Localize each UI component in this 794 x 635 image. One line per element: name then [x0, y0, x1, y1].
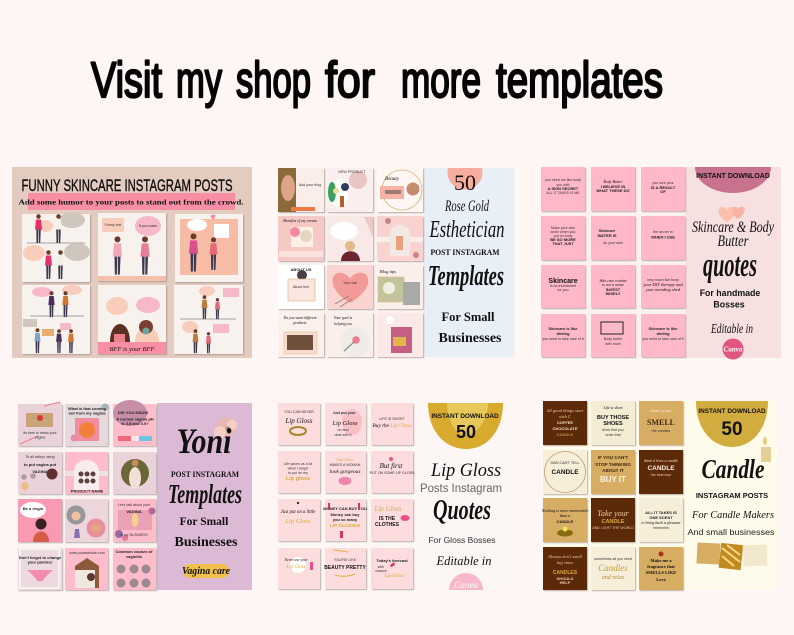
badge: gold instant download 50 — [428, 403, 503, 449]
right column background — [686, 167, 781, 358]
tile: beauty pretty: YOU'RE LIKE — [334, 558, 357, 562]
tile: candle bowl — [541, 498, 589, 542]
tile: quote 6: the secret to — [653, 230, 673, 234]
tile: quote 6 — [641, 216, 685, 260]
text: butter: Butter — [718, 233, 749, 250]
tile: candles and relax: sometimes all you need — [594, 557, 632, 561]
text: posts instagram: Posts Instagram — [420, 483, 502, 495]
tile: coffee chocolate — [543, 401, 587, 445]
badge: 50 — [448, 168, 482, 195]
tile: beauty pretty — [324, 548, 366, 589]
tile: forgot: to put on my — [288, 471, 308, 475]
text: rose gold: Rose Gold — [444, 198, 490, 215]
tile: gloss text — [325, 403, 366, 445]
tile: candles brown: big vines — [557, 560, 573, 565]
tile: quote 3: IS A RESULT — [651, 185, 676, 190]
tile: cream jar — [278, 216, 324, 261]
text: businesses: Businesses — [174, 535, 238, 550]
tile: panties: your panties! — [27, 560, 53, 564]
tile: did you know: A normal vagina pH — [116, 416, 154, 422]
tile: gold ring: Lip Gloss — [284, 417, 313, 425]
tile: quote 1: ALL IT TAKES IS ME — [546, 191, 580, 195]
tile: quote 12: you need to take care of it — [642, 337, 684, 341]
tile: quote 2 — [591, 167, 635, 211]
tile: buy it: IF YOU CAN'T — [598, 455, 628, 460]
tile: herbs: PRODUCT NAME — [71, 488, 104, 494]
text: vagina care: Vagina care — [182, 565, 230, 577]
text: bosses: Bosses — [713, 300, 745, 310]
tile: forecast: Lip Gloss — [383, 574, 404, 579]
text: esthetician: Esthetician — [429, 217, 504, 243]
tile: quote 3: you love your — [652, 181, 674, 185]
panel heading: FUNNY SKINCARE INSTAGRAM POSTS — [22, 176, 232, 195]
tile: look candle: CANDLE — [647, 465, 675, 472]
tile: quote 2: WHAT THESE DO — [596, 188, 630, 193]
title: shop — [236, 52, 311, 108]
text: businesses: Businesses — [438, 331, 502, 346]
tile: buy those shoes: order that — [605, 433, 621, 437]
tile: round candle: CANDLE — [551, 469, 579, 476]
tile: bottle: Lip Gloss — [286, 565, 305, 570]
panel: candle instagram posts — [541, 401, 778, 590]
tile: one scent: to bring back a pleasant — [642, 520, 681, 525]
text: for gloss bosses: For Gloss Bosses — [428, 535, 496, 545]
tile: quote 3: OF — [660, 189, 666, 194]
tile: friends comic — [22, 285, 90, 354]
badge: gold foil instant download 50: INSTANT DOWNLOAD — [698, 408, 766, 415]
tile: quote 7: Skincare — [548, 278, 578, 285]
tile: buy it — [591, 450, 635, 494]
tile: quote 8: INVEST — [606, 287, 621, 292]
tile: quote 4: smile when you — [551, 230, 575, 234]
tile: office talk: Funny text — [105, 223, 121, 227]
tile: candle bowl: than a — [560, 513, 570, 518]
tile: quote 5: do your skin — [603, 241, 623, 245]
icon: hearts — [719, 207, 745, 222]
tile: smell candles — [639, 401, 683, 445]
tile: flowers photo — [377, 265, 423, 309]
tile: is the clothes: CLOTHES — [375, 522, 400, 528]
tile: gold ring: YOU CAN NEVER — [284, 410, 314, 414]
tile: coffee chocolate: All good things start — [546, 408, 584, 413]
tile: smell candles: the candles — [652, 429, 670, 433]
tile: little lip gloss — [278, 499, 320, 541]
text: post instagram: POST INSTAGRAM — [171, 469, 239, 479]
tile: framed photo: products — [292, 321, 307, 325]
tile: fig and eggs — [18, 452, 62, 494]
tile: look candle — [639, 450, 683, 494]
text: yoni: Yoni — [176, 421, 232, 461]
icon: candle — [761, 437, 771, 462]
tile: round candle: MAN CAN'T TELL — [551, 461, 579, 465]
tile: quote 1: you need me like body — [545, 178, 581, 182]
tile: buy those shoes: think that you — [602, 428, 624, 432]
tile: causes: vaginitis — [126, 554, 143, 559]
tile: quote 5: WATER IS — [597, 233, 617, 238]
tile: couple on peach — [175, 214, 243, 282]
panel: funny skincare instagram posts — [12, 167, 252, 358]
text: and small businesses: And small businesses — [688, 527, 774, 537]
tile: take your candle: Take your — [597, 509, 630, 518]
tile: grapefruit — [65, 404, 108, 446]
tile: gloss text: Lip Gloss — [331, 420, 358, 427]
tile: money: MONEY CAN BUY YOU — [323, 506, 367, 511]
tile: money: LIP GLOSSES — [330, 523, 360, 528]
tile: coffee chocolate: CHOCOLATE — [552, 426, 578, 431]
tile: coffee chocolate: COFFEE — [557, 420, 573, 425]
tile: look candle: think it lives a candle — [644, 458, 678, 463]
tile: grapefruit: What is that coming — [68, 406, 107, 411]
tile: quote 11: Body butter — [604, 337, 623, 341]
text: post instagram: POST INSTAGRAM — [430, 247, 500, 257]
tile: buy those shoes: SHOES — [603, 421, 623, 427]
title: templates — [496, 52, 663, 108]
tile: gloss text: on and — [338, 428, 348, 432]
swatches: colour samples — [696, 542, 767, 570]
panel: lip gloss quotes — [278, 403, 516, 590]
tile: is the clothes: Lip Gloss — [373, 505, 402, 513]
tile: framed photo — [278, 313, 324, 357]
tile: detox: vagina — [35, 436, 45, 440]
tile: candles and relax: and relax — [602, 575, 625, 581]
panel: skincare and body butter quotes — [541, 167, 781, 360]
tile: candles and relax: Candles — [598, 563, 628, 573]
tile: about us: About text — [293, 285, 309, 289]
tile: beauty tips ring: Beauty — [385, 177, 400, 182]
tile: detox: Its time to detox your — [23, 431, 57, 435]
tile: money: you so many — [333, 517, 358, 522]
tile: beauty pretty: BEAUTY PRETTY — [324, 565, 366, 571]
tile: BFF talk — [98, 285, 166, 354]
tile: quote 12 — [641, 314, 685, 357]
tile: office talk: If you make — [139, 224, 157, 228]
title: my — [176, 52, 222, 108]
tile: quote 9: your DIY therapy and — [642, 282, 683, 287]
tile: forgot — [278, 451, 320, 493]
text: templates: Templates — [168, 479, 242, 509]
right column background — [424, 168, 514, 357]
tile: smells like love: fragrance that — [647, 564, 675, 569]
tile: is the clothes: IS THE — [379, 516, 396, 522]
text: quotes: Quotes — [433, 495, 491, 526]
tile: panties — [18, 548, 62, 590]
tile: candles brown: SHOULD — [557, 576, 574, 581]
tile: candles brown: Always don't smell — [547, 554, 583, 559]
text: editable in: Editable in — [710, 322, 753, 337]
tile: buy those shoes: Life is short — [602, 405, 623, 410]
tile: portrait in forest: Add your blog — [299, 183, 321, 187]
tile: panties: Don't forget to change — [19, 555, 62, 560]
tile: quote 10: dieting — [556, 331, 570, 336]
logo: canva: Canva — [724, 346, 743, 354]
tile: portrait with bubble — [327, 216, 373, 261]
tile: framed photo: Do you want different — [282, 316, 317, 320]
tile: quote 1 — [541, 167, 585, 211]
badge: 50: 50 — [454, 170, 476, 195]
tile: candle bowl: CANDLE — [557, 519, 574, 524]
tile: quote 9: your mending shed — [645, 287, 681, 292]
tile: one scent: ALL IT TAKES IS — [645, 510, 677, 515]
tile: buy the lip gloss: LIFE IS SHORT — [379, 417, 406, 421]
text: quotes: quotes — [703, 247, 757, 284]
text: editable in: Editable in — [436, 553, 492, 568]
tile: did you know: DID YOU KNOW — [118, 410, 148, 415]
banner: instant download: INSTANT DOWNLOAD — [696, 173, 770, 180]
tile: causes: Common causes of — [116, 549, 153, 554]
badge: gold instant download 50: 50 — [456, 422, 476, 442]
tile: quote 7: is an investment — [550, 284, 576, 288]
tile: forecast: Today's forecast — [376, 558, 408, 563]
title — [91, 52, 663, 108]
tile: rose on plate — [327, 313, 373, 357]
tile: quote 10 — [541, 314, 585, 357]
tile: money — [323, 499, 367, 541]
text: for small: For Small — [180, 516, 228, 528]
tile: one scent: memories — [653, 526, 669, 530]
tile: one scent: ONE SCENT — [649, 515, 673, 520]
panel: yoni templates — [17, 400, 252, 590]
tile: quote 11 — [591, 314, 635, 357]
tile: buy the lip gloss: Buy the Lip Gloss — [372, 423, 412, 429]
tile: flowers photo: Blog tips — [380, 269, 396, 274]
tile: quote 1: A SKIN SECRET — [548, 186, 579, 191]
tile: look candle: the best kept — [651, 473, 671, 477]
tile: gloss text: Just put your — [333, 411, 356, 415]
tile: cream jar: Benefits of my cream — [283, 218, 317, 223]
tile: arch with bottle — [377, 216, 423, 261]
tile: cartoon woman: Be a virgin — [23, 506, 44, 511]
tile: let's talk: is my BUSINESS — [120, 533, 148, 537]
tile: fig and eggs: VAGINA — [32, 469, 48, 474]
tile: arch photo: www.yourwebsite.com — [69, 551, 105, 555]
tile: red lips post: PUT ON SOME LIP GLOSS — [370, 471, 415, 475]
logo: canva: Canva — [454, 580, 478, 590]
tile: gloss text: deal with it — [335, 433, 351, 437]
tile: let's talk: Let's talk about your — [118, 503, 151, 507]
tile: quote 3 — [641, 167, 685, 211]
icon: flower — [214, 417, 237, 438]
tile: smell candles: Wake up and — [650, 409, 672, 413]
panel: rose gold esthetician templates — [278, 168, 515, 357]
banner: instant download — [695, 167, 771, 193]
tile: portrait in forest — [278, 168, 324, 212]
tile: round candle — [543, 450, 587, 494]
tile: lips — [325, 451, 366, 493]
subheading highlight — [18, 193, 244, 210]
badge: gold instant download 50: INSTANT DOWNLOAD — [431, 413, 499, 420]
tile: quote 2: I BELIEVE IN — [601, 184, 625, 189]
tile: product with green: NEW PRODUCT — [338, 170, 366, 174]
tile: did you know: is 3.8 and 4.5? — [121, 421, 149, 426]
title: for — [325, 52, 375, 108]
tile: candles brown: HELP — [560, 580, 571, 585]
tile: quote 1: you with — [556, 183, 570, 187]
tile: candle bowl: Nothing is more memorable — [541, 508, 589, 513]
tile: quote 9 — [641, 265, 685, 308]
tile: quote 12: dieting — [656, 331, 670, 336]
tile: product with green — [327, 168, 373, 212]
tile: quote 8: WISELY — [606, 291, 621, 296]
tile: lips: Lip Gloss — [335, 457, 354, 462]
text: instagram posts: INSTAGRAM POSTS — [696, 491, 768, 500]
tile: quote 4 — [541, 216, 585, 260]
tile: herbs — [65, 452, 108, 494]
tile: rose on plate: helping you — [334, 322, 352, 326]
tile: magenta product — [377, 313, 423, 357]
tile: quote 4: BE SO MORE — [550, 237, 576, 242]
tile: red lips post — [370, 451, 415, 493]
tile: arch photo — [65, 548, 108, 590]
tile: rose on plate: Your goal is — [334, 316, 353, 320]
tile: buy it: ABOUT IT — [602, 468, 624, 473]
tile: quote 11: with more — [605, 342, 621, 346]
tile: candles and relax — [591, 547, 635, 590]
tile: detox — [18, 402, 62, 446]
tile: take your candle: CANDLE — [602, 519, 625, 525]
tile: forecast — [371, 548, 413, 589]
tile: cartoon woman — [18, 499, 62, 542]
tile: red lips post: But first — [380, 462, 403, 470]
tile: causes — [113, 548, 156, 590]
tile: quote 2: Body Butter — [603, 179, 623, 184]
tile: gold ring — [278, 403, 320, 445]
tile: bottle — [278, 548, 320, 589]
tile: quote 8: Skin care routine — [599, 278, 627, 283]
tile: quote 8: is not a waste — [602, 282, 624, 287]
tile: lips: MAKES A WOMAN — [330, 463, 361, 467]
tile: buy those shoes — [591, 401, 635, 445]
tile: little lip gloss: Just put on a little — [281, 510, 316, 515]
text: candle: Candle — [702, 454, 765, 484]
tile: forgot: when I forget — [288, 466, 308, 470]
tile: forecast: with — [378, 565, 384, 569]
title: more — [401, 52, 481, 108]
tile: quote 5 — [591, 216, 635, 260]
text: for candle makers: For Candle Makers — [691, 510, 774, 521]
tile: office talk — [98, 213, 166, 281]
tile: buy it: BUY IT — [600, 475, 626, 484]
tile: quote 9: very much like body — [647, 278, 679, 282]
logo: canva — [722, 338, 744, 360]
tile: smells like love: Love — [656, 577, 666, 582]
tile: heart: Your call — [343, 281, 357, 285]
tile: quote 10: you need to take care of it — [542, 337, 584, 341]
tile: about us — [278, 265, 324, 309]
tile: woman in field — [113, 452, 156, 494]
text: lip gloss: Lip Gloss — [430, 460, 501, 481]
tile: buy those shoes: BUY THOSE — [597, 415, 629, 421]
tile: two faces — [65, 499, 108, 542]
text: templates: Templates — [428, 260, 504, 292]
tile: one scent — [639, 498, 683, 542]
tile: quote 7 — [541, 265, 585, 308]
tile: take your candle — [591, 498, 635, 542]
badge: gold foil instant download 50 — [696, 401, 768, 447]
tile: heart — [327, 265, 373, 309]
tile: buy the lip gloss — [371, 403, 413, 445]
tile: is the clothes — [371, 499, 413, 541]
logo: canva — [449, 573, 483, 590]
tile: beauty tips ring — [377, 168, 423, 212]
text: for handmade: For handmade — [700, 288, 760, 298]
tile: quote 7: for you — [558, 288, 568, 292]
tile: forecast: chance — [375, 569, 387, 573]
text: for small: For Small — [442, 310, 495, 324]
tile: smells like love: Make me a — [650, 558, 672, 563]
tile: grapefruit: out from my vagina — [69, 410, 106, 416]
tile: quote 6: WHEN I USE — [651, 234, 675, 240]
tile: quote 4: Make your skin — [551, 226, 575, 230]
tile: smells like love — [639, 547, 683, 590]
tile: quote 5: Skincare — [599, 228, 616, 233]
tile: money: Money can buy — [331, 512, 360, 517]
tile: smells like love: SMELLS LIKE — [646, 570, 676, 575]
tile: about us: ABOUT US — [291, 267, 312, 272]
tile: candles brown — [543, 547, 587, 590]
tile: coffee chocolate: CANDLE — [557, 432, 574, 437]
tile: forgot: Life saves us a lot — [284, 462, 312, 466]
tile: coffee chocolate: with C — [559, 414, 572, 419]
tile: lips: look gorgeous — [329, 469, 361, 475]
tile: quote 4: put on body — [554, 234, 573, 238]
tile: quote 10: Skincare is like — [549, 326, 578, 331]
right column background — [157, 403, 252, 590]
tile: two-panel comic — [22, 212, 90, 282]
tile: forgot: Lip gloss — [286, 476, 310, 482]
title: Visit — [91, 52, 162, 108]
tile: candles brown: CANDLES — [553, 570, 578, 576]
tile: quote 4: THAT JUST — [552, 241, 574, 246]
tile: fig and eggs: to put vagina pot — [24, 462, 57, 467]
tile: quote 12: Skincare is like — [649, 326, 678, 331]
tile: let's talk: VAGINA — [126, 509, 142, 514]
tile: bottle: Never use your — [284, 558, 308, 562]
subheading highlight: Add some humor to your posts to stand out from the crowd. — [18, 198, 244, 206]
tile: quote 8 — [591, 265, 635, 308]
badge: gold foil instant download 50: 50 — [721, 419, 743, 440]
tile: couple comic — [174, 285, 243, 354]
tile: buy it: STOP THINKING — [595, 462, 631, 467]
tile: smell candles: SMELL — [647, 418, 675, 427]
tile: let's talk — [113, 499, 156, 542]
tile: BFF talk: BFF is your BFF — [110, 346, 156, 353]
tile: did you know — [113, 400, 156, 446]
tile: take your candle: AND LIGHT THE WORLD — [592, 526, 634, 530]
tile: fig and eggs: To all wifeys using — [26, 455, 54, 459]
tile: little lip gloss: Lip Gloss — [284, 518, 311, 525]
